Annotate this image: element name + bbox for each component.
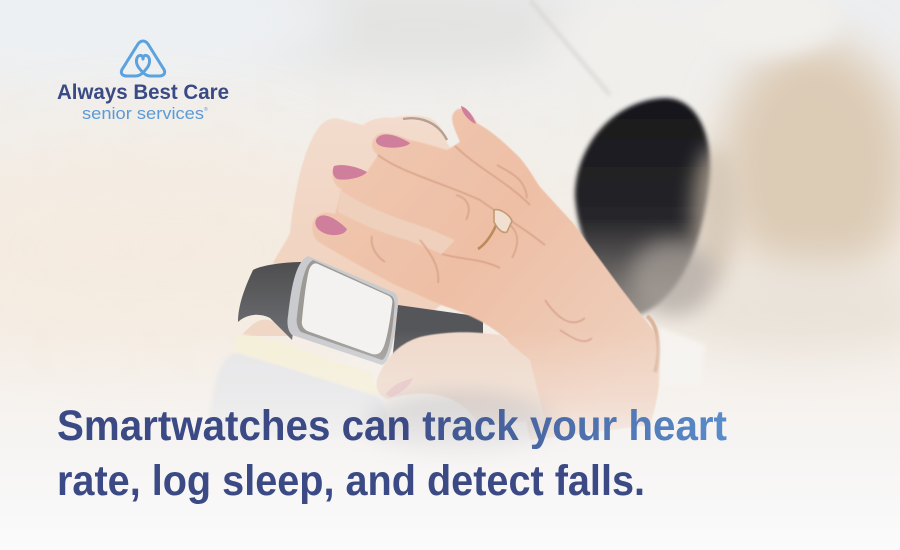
nails bbox=[315, 106, 476, 235]
gap between fingers bbox=[338, 190, 455, 254]
hidden ring bbox=[403, 118, 447, 140]
right sleeve bbox=[660, 328, 705, 385]
hands and watch photo bbox=[205, 106, 705, 457]
bottom white fade bbox=[0, 330, 900, 550]
sweater sleeve bbox=[205, 352, 388, 440]
left watch strap bbox=[238, 262, 303, 340]
back hand bbox=[273, 116, 480, 340]
right strap behind hand bbox=[392, 305, 483, 362]
bracelet bbox=[647, 316, 658, 372]
logo icon: house and heart bbox=[121, 41, 165, 76]
finger shading bbox=[372, 146, 592, 341]
watch screen bbox=[302, 263, 392, 354]
dark hair bbox=[575, 98, 710, 315]
headline bbox=[57, 402, 727, 505]
marble surface top bbox=[0, 0, 730, 95]
thumb shadow bbox=[365, 393, 555, 457]
fluffy blanket bbox=[0, 80, 620, 380]
registered mark: ® bbox=[204, 106, 208, 113]
sleeve cuff bbox=[235, 333, 378, 396]
blurred head at right bbox=[720, 40, 900, 290]
watch case bbox=[287, 256, 398, 365]
logo tagline: senior services bbox=[82, 105, 204, 123]
logo wordmark: Always Best Care bbox=[57, 80, 229, 104]
top hand with fingers bbox=[312, 109, 660, 440]
wrist skin bbox=[240, 320, 288, 336]
ring bbox=[478, 210, 512, 249]
thumb nail bbox=[386, 378, 413, 397]
headline line one: Smartwatches can track your heart bbox=[57, 402, 727, 450]
thumb bbox=[377, 332, 545, 425]
headline line two: rate, log sleep, and detect falls. bbox=[57, 457, 645, 505]
logo bbox=[57, 41, 229, 123]
